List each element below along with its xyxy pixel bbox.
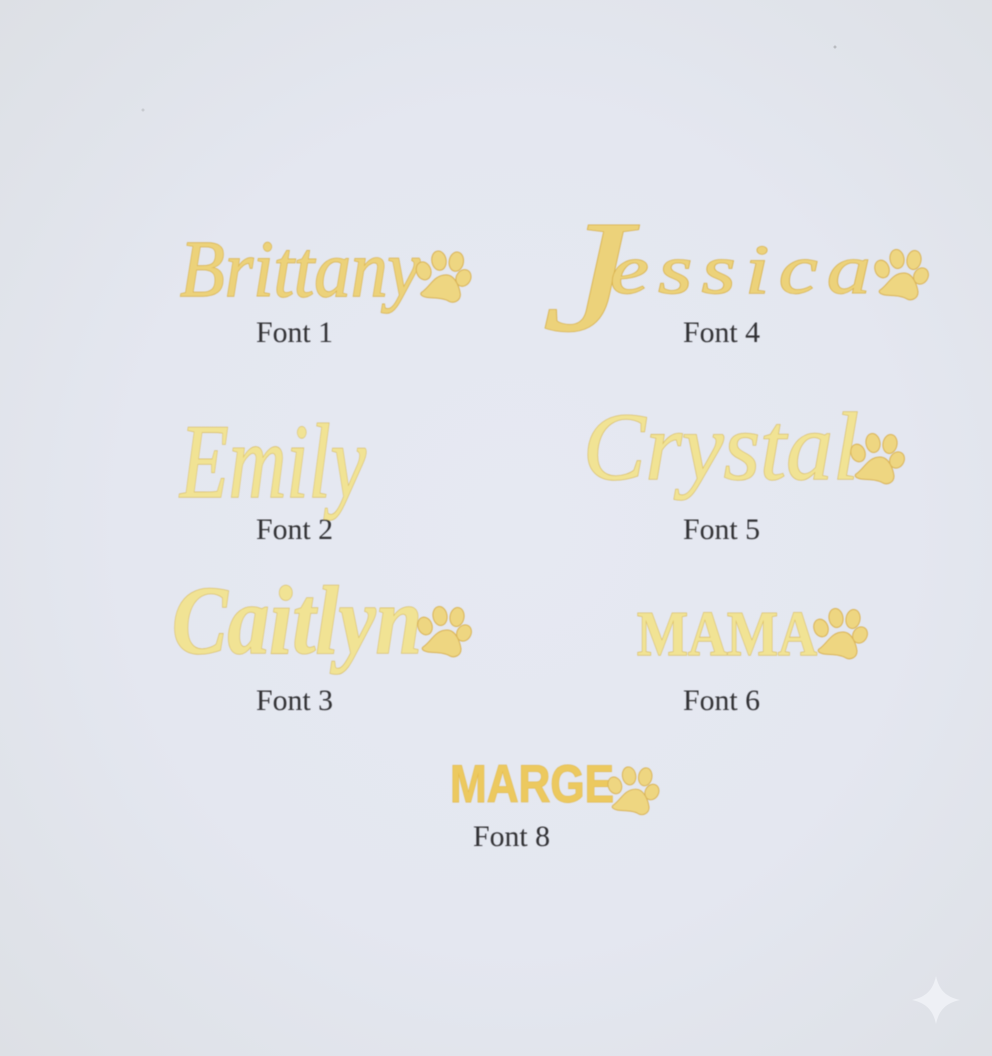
name: Caitlyn: Caitlyn	[172, 567, 422, 675]
label: Font 1: Font 1	[256, 316, 333, 349]
icon: paw	[848, 432, 907, 484]
name: Jessica: J	[542, 189, 640, 365]
icon: paw	[811, 607, 870, 659]
icon: paw	[606, 766, 662, 815]
item: Font 4 Jessica	[542, 189, 931, 365]
name: MAMA: MAMA	[637, 598, 817, 669]
label: Font 4: Font 4	[683, 316, 760, 349]
icon: paw	[415, 605, 474, 657]
name: Emily: Emily	[178, 403, 367, 520]
item: Font 3 Caitlyn	[172, 567, 474, 717]
label: Font 3: Font 3	[256, 684, 333, 717]
name: Brittany: Brittany	[180, 226, 420, 314]
item: Font 5 Crystal	[583, 393, 907, 546]
icon: sparkle watermark	[912, 976, 960, 1024]
name: MARGE: MARGE	[450, 755, 614, 814]
label: Font 8: Font 8	[473, 820, 550, 853]
name: Crystal: Crystal	[583, 393, 859, 500]
name: Jessica: essica	[610, 231, 880, 309]
icon: paw	[414, 250, 474, 302]
item: Font 8 MARGE	[450, 755, 662, 853]
icon: paw	[872, 248, 931, 300]
label: Font 6: Font 6	[683, 684, 760, 717]
item: Font 6 MAMA	[637, 598, 870, 717]
item: Font 2 Emily	[178, 403, 367, 546]
label: Font 5: Font 5	[683, 513, 760, 546]
item: Font 1 Brittany	[180, 226, 474, 349]
label: Font 2: Font 2	[256, 513, 333, 546]
